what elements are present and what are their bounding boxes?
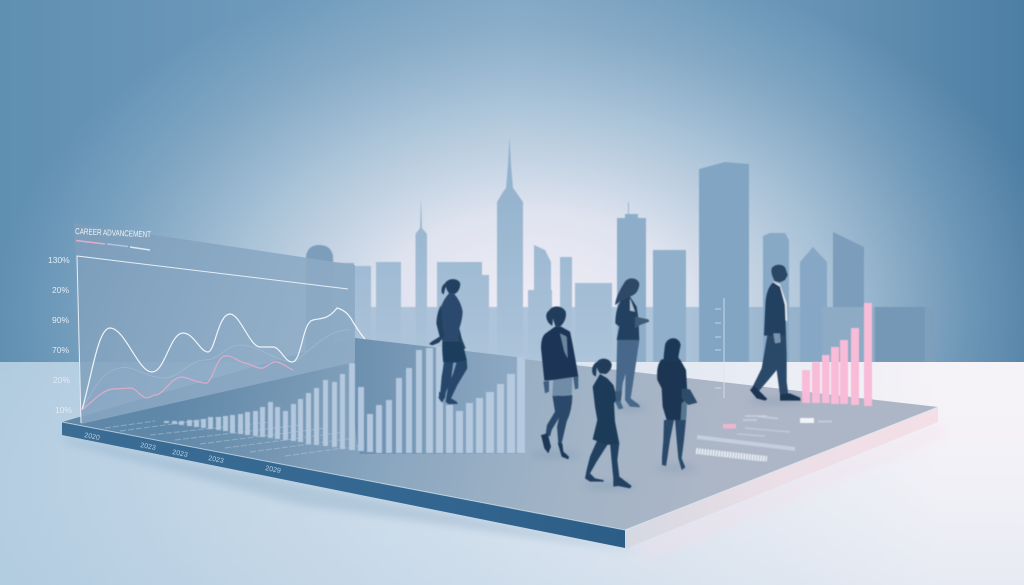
floor shading <box>0 362 1024 585</box>
dashed data band <box>696 451 767 459</box>
folder <box>682 388 697 405</box>
platform top surface <box>62 339 938 530</box>
platform right side face <box>625 407 938 548</box>
floor <box>0 362 1024 585</box>
skirt edge <box>681 398 687 420</box>
head and ponytail <box>441 279 460 295</box>
person 6: man in suit <box>750 265 801 401</box>
heels <box>541 433 569 459</box>
figure shadows <box>531 398 804 488</box>
dress <box>657 359 687 420</box>
floor grid labels <box>105 417 365 456</box>
person 2: woman in blazer <box>541 307 578 459</box>
pink swatch caption <box>737 428 790 436</box>
head <box>771 265 788 282</box>
legs <box>546 395 572 443</box>
torso and skirt <box>440 293 467 363</box>
chart title: CAREER ADVANCEMENT <box>75 226 151 239</box>
city skyline <box>306 137 935 363</box>
shirt highlight <box>630 298 635 312</box>
head and ponytail <box>592 359 612 377</box>
scale ticks <box>715 309 721 388</box>
white line series <box>82 308 365 410</box>
person 4: woman standing with tablet <box>615 278 649 409</box>
sky glow <box>0 0 1024 363</box>
long bar <box>697 437 795 449</box>
year labels on the platform edge: 2023 <box>172 449 188 459</box>
platform shadow <box>62 437 640 552</box>
skirt <box>443 342 467 363</box>
arms <box>429 305 466 349</box>
y axis labels: 70% <box>52 345 69 355</box>
hands <box>543 377 578 393</box>
legs and heels <box>438 359 467 404</box>
light vertical scale <box>715 298 724 398</box>
sky background <box>0 0 1024 363</box>
y axis labels: 20% <box>52 285 69 295</box>
legs and heels <box>585 440 632 488</box>
shirt <box>560 333 568 358</box>
pink line series <box>82 356 293 410</box>
platform data marks <box>696 416 832 459</box>
trousers <box>753 334 788 395</box>
shoes <box>750 386 801 401</box>
device in hand <box>615 391 622 402</box>
year labels on the platform edge: 2023 <box>140 442 156 452</box>
jacket <box>615 297 639 340</box>
torso and skirt <box>593 374 619 445</box>
bar chart <box>164 347 525 453</box>
year labels on the platform edge: 2020 <box>84 432 100 442</box>
skirt <box>552 377 572 396</box>
bar chart backdrop <box>353 338 525 454</box>
legs and heels <box>615 339 640 409</box>
jacket <box>764 282 786 336</box>
legend swatches <box>76 240 150 250</box>
year labels on the platform edge: 2029 <box>265 465 281 475</box>
glass chart panel <box>48 223 365 424</box>
y axis labels: 20% <box>53 375 70 385</box>
pink swatch <box>723 424 736 428</box>
small white label lines <box>743 416 778 420</box>
swatch caption <box>818 420 832 422</box>
platform <box>62 339 938 548</box>
blazer <box>541 327 578 381</box>
forearm and device <box>635 317 649 328</box>
pink bar chart <box>802 303 872 406</box>
person 1: woman walking on chart <box>429 279 467 404</box>
person 3: short woman walking <box>585 359 632 488</box>
head and long hair <box>615 278 639 305</box>
head and hair <box>663 338 681 362</box>
white shirt <box>773 282 787 322</box>
platform front edge highlight <box>62 407 938 530</box>
platform glow <box>630 425 950 558</box>
year labels on the platform edge <box>84 432 281 475</box>
panel pane <box>74 223 355 424</box>
y axis labels: 90% <box>52 315 69 325</box>
platform left side face <box>62 422 625 548</box>
y axis labels <box>48 255 72 415</box>
year labels on the platform edge: 2023 <box>208 455 224 465</box>
faint line series <box>82 330 350 410</box>
legs and heels <box>662 420 686 470</box>
axes <box>77 256 348 423</box>
white swatch <box>800 418 814 423</box>
person 5: woman with folder <box>657 338 697 470</box>
y axis labels: 130% <box>48 255 70 265</box>
head and ponytail <box>546 307 566 327</box>
hand <box>773 333 781 343</box>
y axis labels: 10% <box>55 405 72 415</box>
